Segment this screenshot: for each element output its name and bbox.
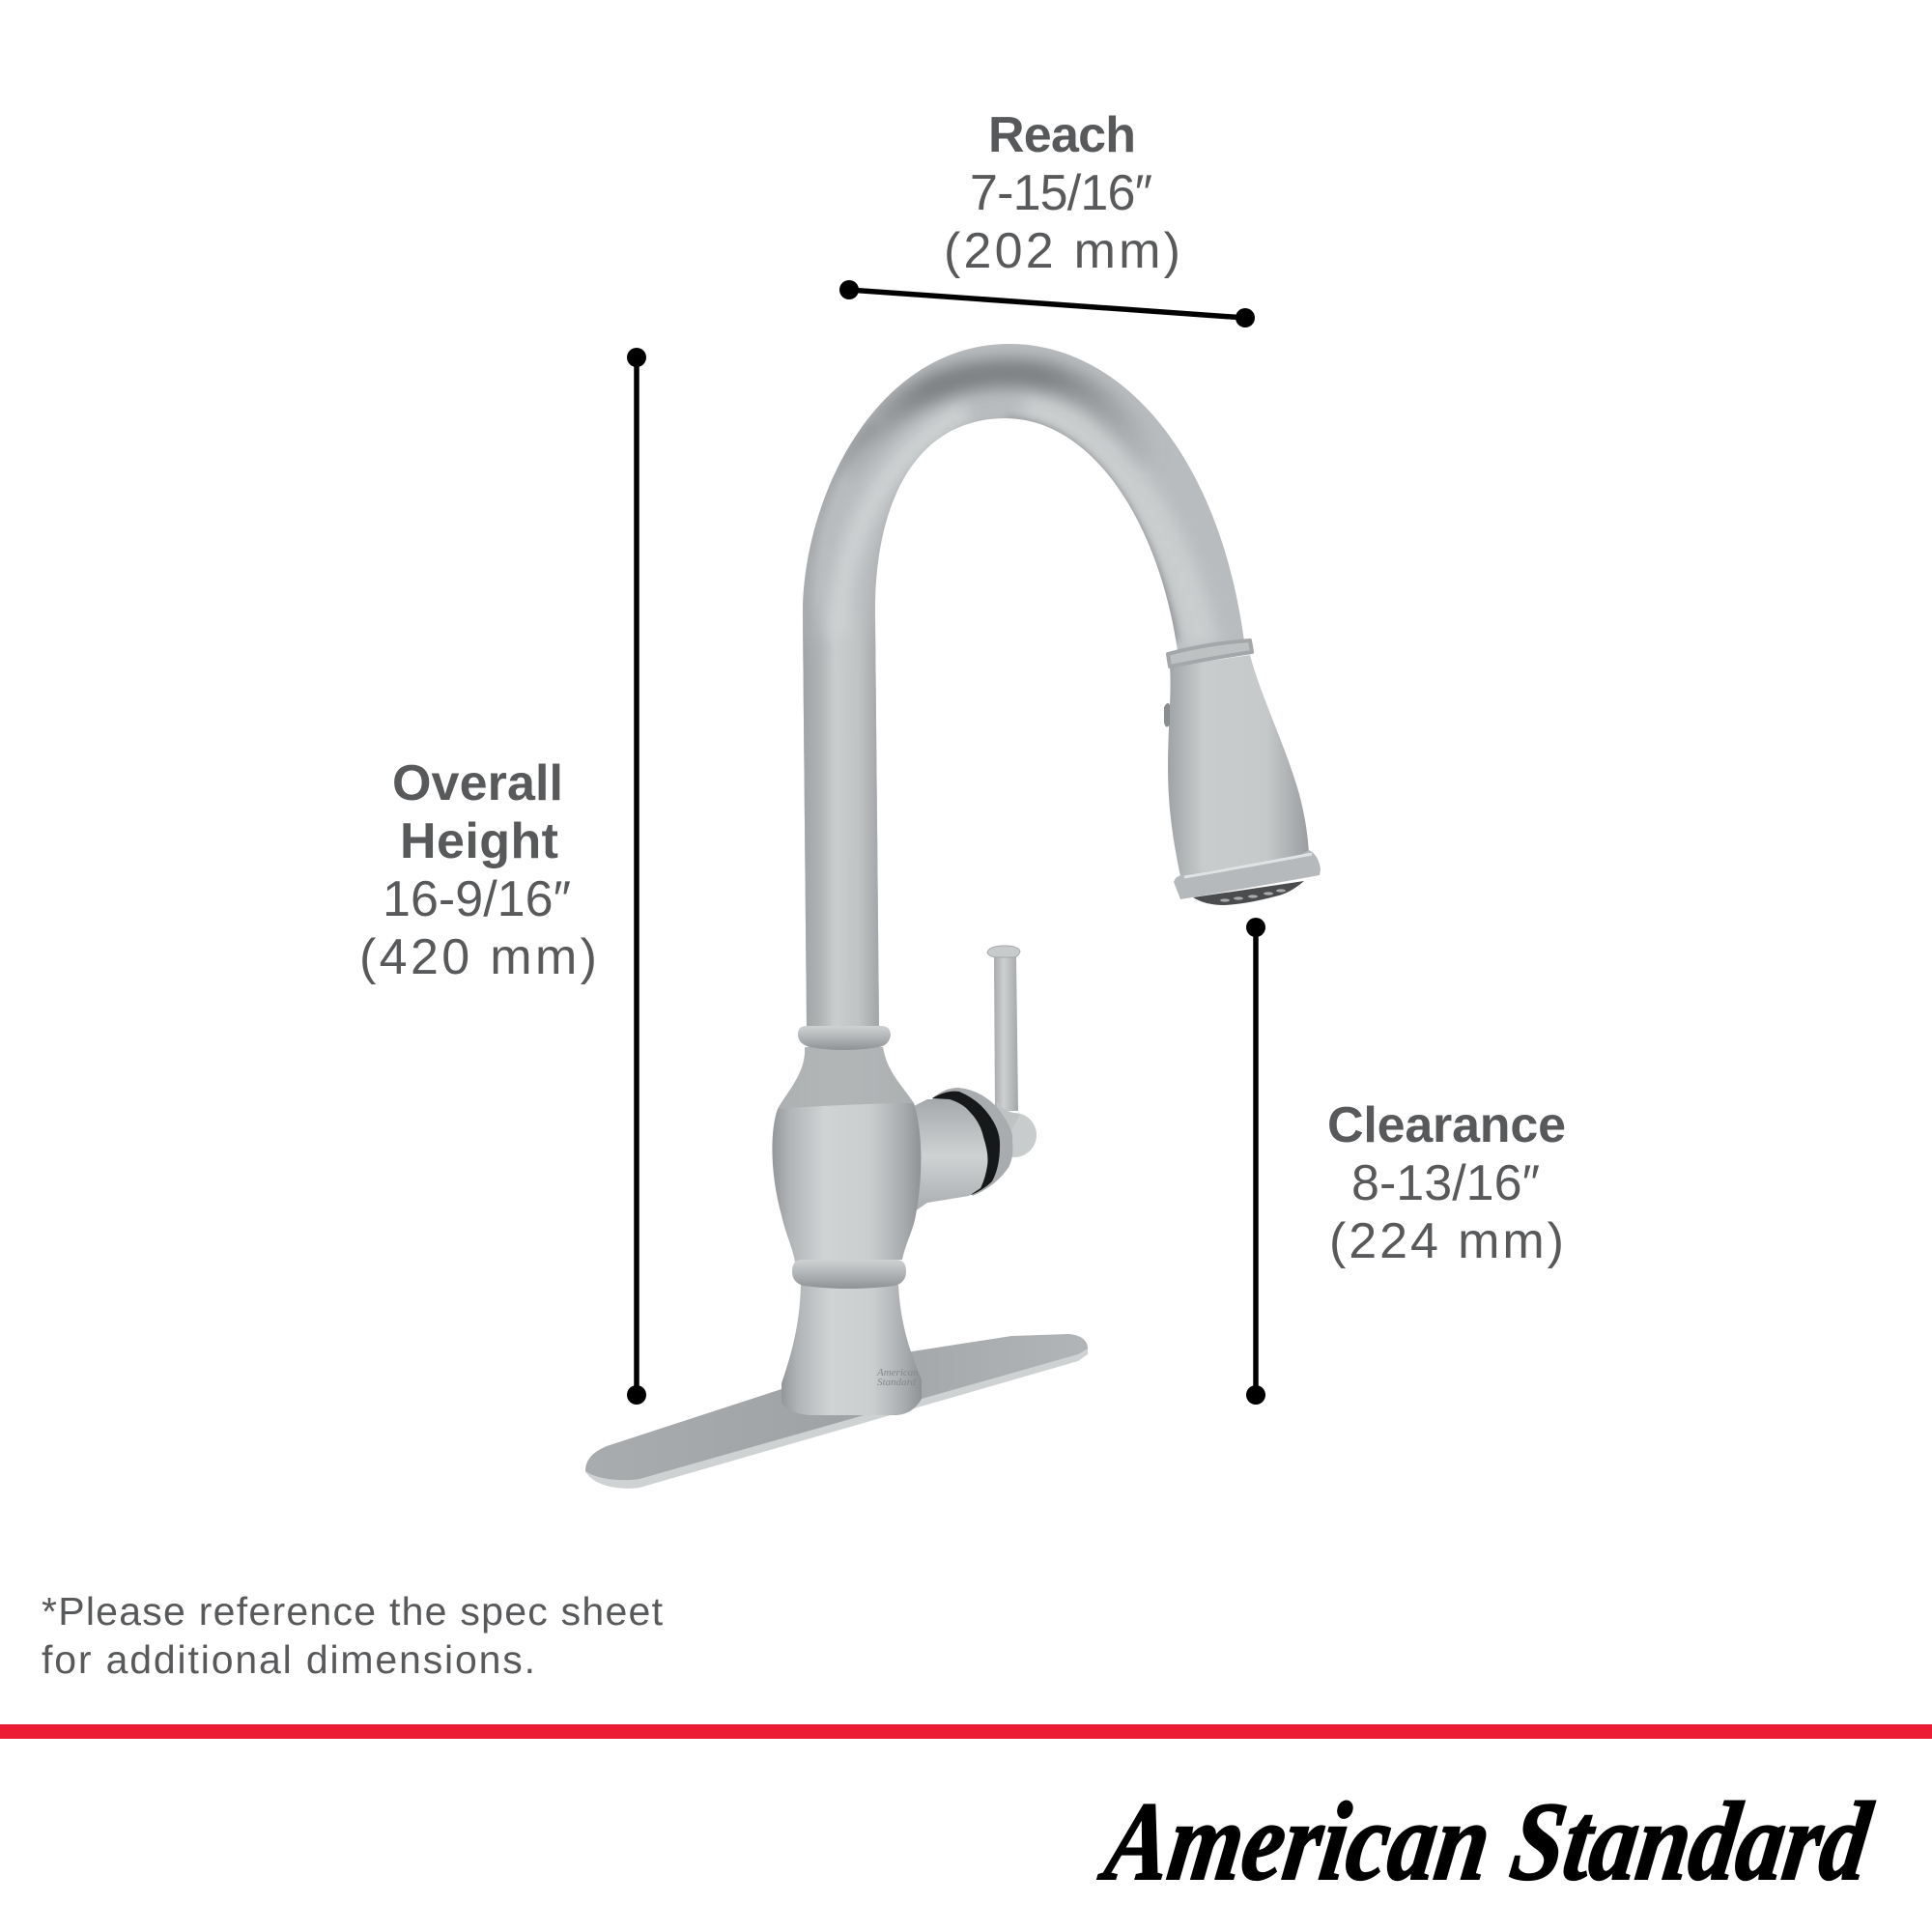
spray head collar: [1168, 640, 1252, 667]
lever top cap: [987, 946, 1020, 957]
footnote: *Please reference the spec sheet: [42, 1589, 664, 1634]
handle arm: [912, 1099, 987, 1213]
spray head rim: [1174, 850, 1321, 899]
dimension: reach: [839, 107, 1255, 327]
red divider bar: [0, 1724, 1932, 1739]
clearance label: Clearance: [1327, 1097, 1566, 1153]
lever knob: [992, 1113, 1037, 1157]
footnote: for additional dimensions.: [42, 1637, 535, 1682]
reach inches: 7-15/16″: [970, 165, 1152, 221]
height label line 2: Height: [400, 813, 558, 869]
brand mark on base: [876, 1367, 919, 1388]
lower collar: [792, 1260, 906, 1289]
reach label: Reach: [988, 107, 1136, 163]
dimension: clearance: [1246, 918, 1566, 1405]
reach millimetres: (202 mm): [944, 223, 1180, 279]
spray face: [1193, 881, 1304, 905]
height inches: 16-9/16″: [383, 871, 571, 927]
brand mark on base: Standard: [877, 1377, 916, 1388]
handle cap: [932, 1088, 1012, 1196]
base flare: [781, 1285, 922, 1415]
deck plate: [585, 1334, 1088, 1489]
dimension: overall height: [359, 348, 646, 1405]
height millimetres: (420 mm): [359, 929, 597, 985]
spray head: [1164, 640, 1321, 905]
faucet product image: [585, 344, 1321, 1489]
spray button: [1164, 703, 1170, 727]
brand mark on base: American: [876, 1367, 919, 1378]
footnote: [42, 1589, 664, 1682]
lever stem: [994, 956, 1018, 1111]
upper collar: [798, 1026, 891, 1050]
clearance arrow line: [1246, 918, 1265, 1405]
black ring: [932, 1092, 1000, 1195]
body: [772, 1047, 921, 1262]
reach arrow line: [839, 280, 1255, 327]
clearance inches: 8-13/16″: [1351, 1155, 1540, 1211]
neck spout: [797, 344, 1244, 1082]
height arrow line: [627, 348, 646, 1405]
height label: Overall: [392, 755, 563, 811]
clearance millimetres: (224 mm): [1329, 1213, 1564, 1269]
lever handle: [912, 946, 1037, 1213]
